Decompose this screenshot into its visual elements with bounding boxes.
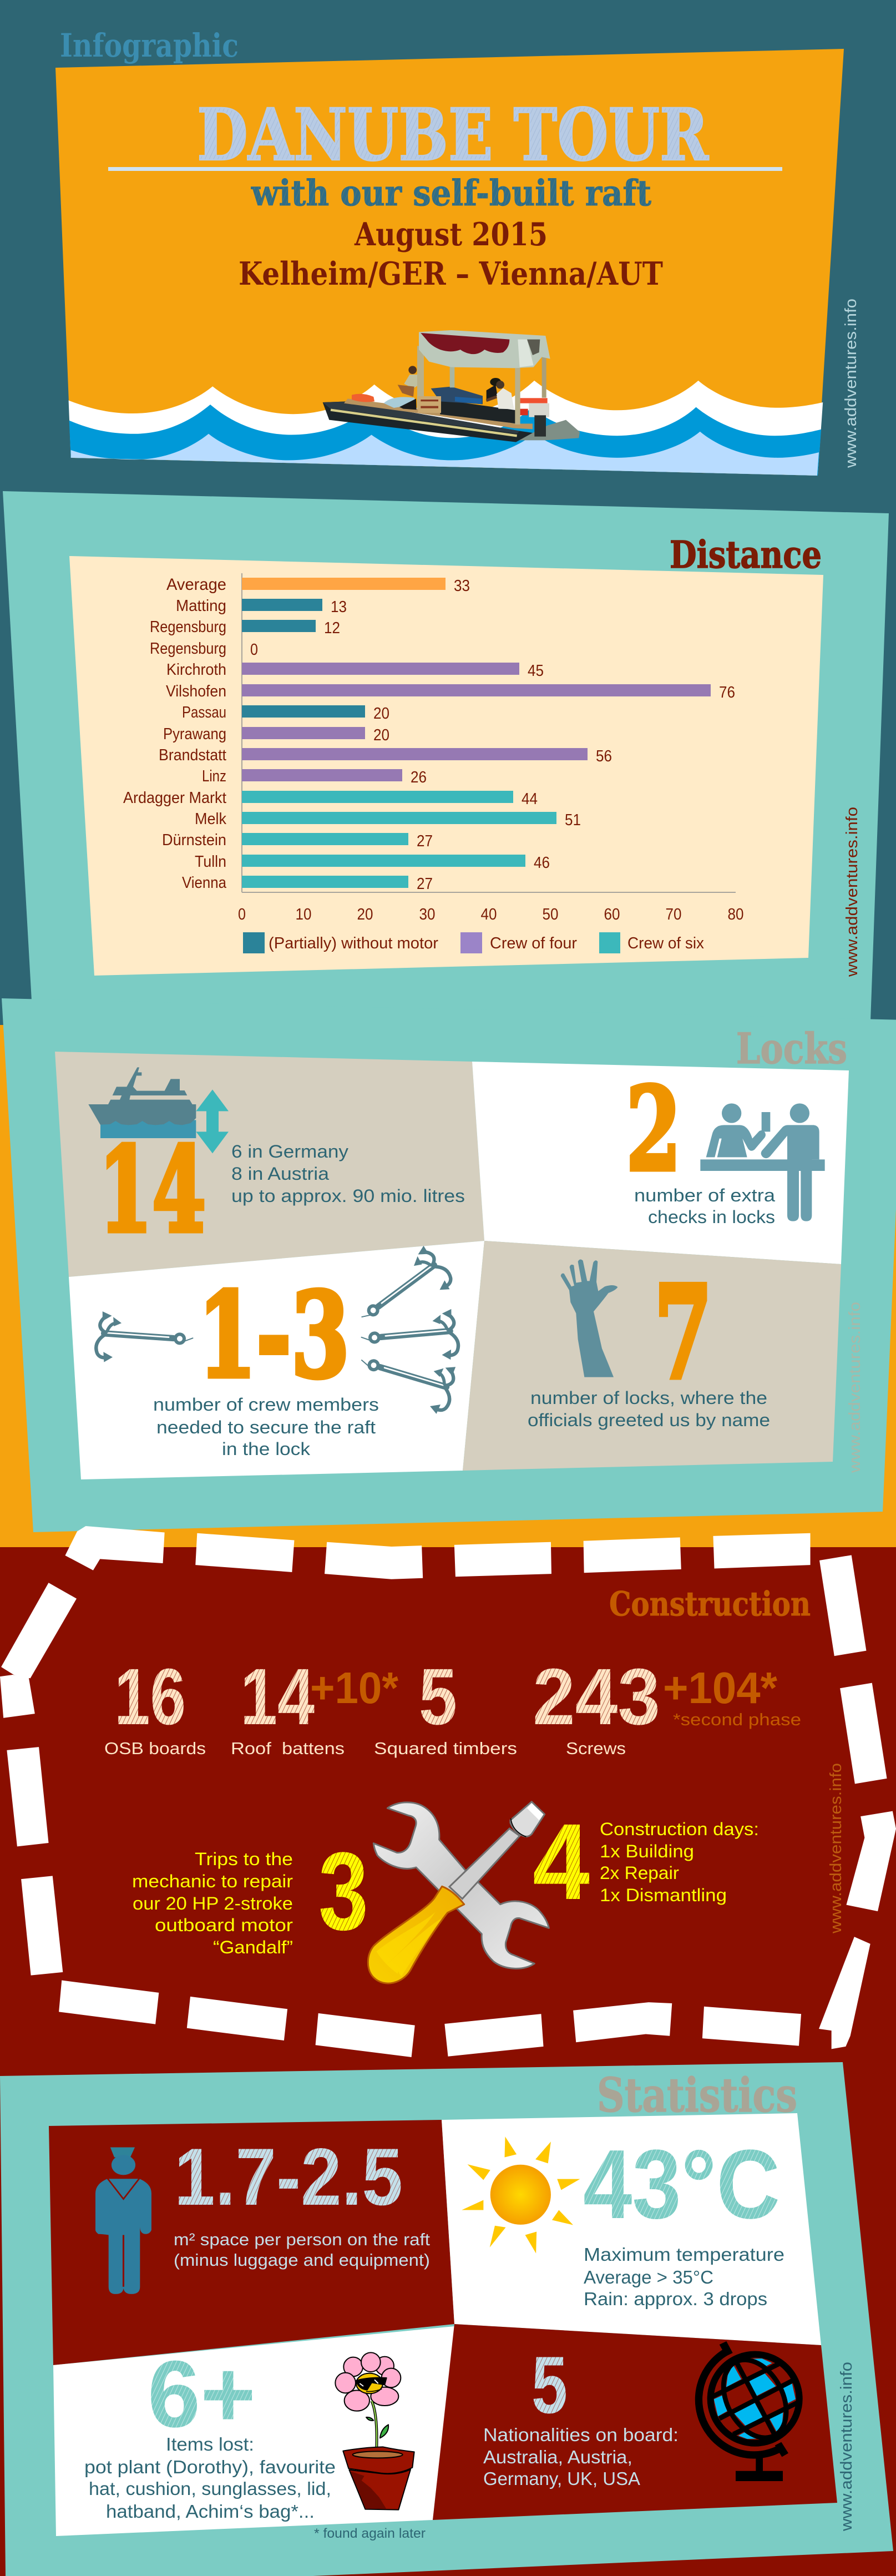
- construction days text: Construction days:: [600, 1819, 759, 1839]
- construction days text: [600, 1819, 759, 1905]
- bar chart: 27: [417, 832, 433, 850]
- bar chart: 76: [719, 684, 735, 701]
- heading: Locks: [736, 1024, 847, 1073]
- bar chart: 50: [543, 906, 558, 923]
- bar chart: Vilshofen: [166, 683, 226, 700]
- greeted text: number of locks, where the: [530, 1388, 767, 1408]
- bar chart: Average: [166, 575, 226, 594]
- waves: [69, 381, 823, 476]
- panel: hero: [55, 27, 860, 476]
- tile: nationalities: [433, 2324, 837, 2520]
- number: 6+: 6+: [148, 2341, 256, 2447]
- materials numbers: +10*: [310, 1663, 399, 1713]
- materials numbers: 5: [419, 1652, 457, 1741]
- subtitle: with our self-built raft: [251, 173, 651, 214]
- bar chart: 20: [373, 726, 389, 744]
- mechanic trips text: mechanic to repair: [132, 1871, 293, 1891]
- materials labels: Screws: [566, 1739, 626, 1758]
- watermark: www.addventures.info: [827, 1763, 845, 1934]
- materials numbers: 243: [533, 1652, 660, 1741]
- teal card: [3, 491, 889, 1021]
- number: 43°C: 43°C: [583, 2129, 780, 2239]
- number: 4: 4: [533, 1801, 590, 1922]
- bar chart: 51: [565, 811, 581, 829]
- bar chart: 20: [357, 906, 373, 923]
- nationalities text: Germany, UK, USA: [483, 2468, 640, 2489]
- bar chart: 20: [373, 705, 389, 723]
- bar chart: Tulln: [195, 853, 226, 871]
- mechanic trips text: outboard motor: [155, 1915, 293, 1935]
- icon: globe: [698, 2341, 799, 2481]
- bar chart: Brandstatt: [159, 746, 226, 764]
- tile: top right: [472, 1062, 849, 1264]
- bar chart: 0: [250, 641, 258, 659]
- nationalities text: Nationalities on board:: [483, 2425, 679, 2445]
- watermark: www.addventures.info: [846, 1302, 864, 1473]
- bar chart: 45: [528, 662, 544, 680]
- tile: top left: [55, 1052, 484, 1277]
- items lost text: [84, 2434, 336, 2522]
- bar chart: 33: [454, 577, 470, 595]
- items lost text: Items lost:: [166, 2434, 254, 2454]
- hero orange card: [55, 49, 844, 476]
- bar chart: Dürnstein: [162, 831, 226, 849]
- icon: sun: [462, 2136, 580, 2254]
- greeted text: [528, 1388, 770, 1430]
- extra checks text: [634, 1185, 775, 1227]
- materials labels: OSB boards: [104, 1739, 206, 1758]
- tile: items lost: [53, 2326, 454, 2536]
- number: 1-3: 1-3: [198, 1267, 350, 1404]
- page background: dark red: [0, 1547, 896, 2576]
- materials labels: [104, 1739, 626, 1758]
- page background: dark teal: [0, 0, 896, 1027]
- nationalities text: [483, 2425, 679, 2489]
- tile: temperature: [442, 2113, 821, 2345]
- bar chart: Kirchroth: [166, 661, 226, 679]
- icon: ship: [88, 1067, 229, 1153]
- materials numbers: +104*: [663, 1663, 778, 1713]
- temperature text: Average > 35°C: [584, 2267, 713, 2287]
- icon: wrench and screwdriver: [368, 1802, 549, 1983]
- mechanic trips text: [132, 1849, 293, 1957]
- bar chart: 44: [522, 790, 538, 808]
- bar chart: 46: [534, 854, 550, 872]
- bar chart: Pyrawang: [163, 725, 226, 743]
- space text: (minus luggage and equipment): [174, 2250, 430, 2270]
- page background: orange band: [0, 1025, 896, 1547]
- legend: Crew of six: [627, 935, 704, 952]
- bar chart: 56: [596, 747, 612, 765]
- bar chart: 13: [331, 598, 347, 616]
- bar chart: 26: [411, 769, 427, 786]
- items lost text: pot plant (Dorothy), favourite: [84, 2457, 336, 2477]
- icon: pot plant: [335, 2352, 414, 2510]
- bar chart: [123, 573, 743, 923]
- number: 14: 14: [99, 1122, 206, 1259]
- icon: hand: [561, 1260, 617, 1377]
- bar chart: 0: [238, 906, 246, 923]
- icon: raft: [323, 330, 580, 442]
- tile: bottom left: [69, 1241, 484, 1479]
- note: second phase: *second phase: [673, 1710, 801, 1729]
- lock counts text: [231, 1141, 465, 1206]
- panel: statistics: [0, 2062, 893, 2576]
- construction days text: 1x Dismantling: [600, 1885, 727, 1905]
- bar chart: 70: [666, 906, 681, 923]
- icon: sailor: [95, 2147, 151, 2294]
- temperature text: Maximum temperature: [584, 2244, 784, 2265]
- tile: space per person: [49, 2120, 454, 2365]
- bar chart: Linz: [202, 767, 226, 785]
- footnote: * found again later: [314, 2526, 426, 2541]
- bar chart: 12: [324, 619, 340, 637]
- construction days text: 2x Repair: [600, 1863, 679, 1883]
- number: 2: 2: [626, 1062, 681, 1198]
- greeted text: officials greeted us by name: [528, 1410, 770, 1430]
- crew text: in the lock: [222, 1439, 311, 1459]
- panel: locks: [2, 998, 896, 1532]
- cream chart card: [69, 556, 823, 976]
- bar chart: Regensburg: [150, 640, 226, 658]
- crew text: needed to secure the raft: [156, 1417, 376, 1437]
- items lost text: hatband, Achim‘s bag*...: [106, 2501, 315, 2522]
- bar chart: Vienna: [182, 874, 227, 892]
- bar chart: 30: [419, 906, 435, 923]
- nationalities text: Australia, Austria,: [483, 2447, 632, 2467]
- space text: m² space per person on the raft: [174, 2230, 430, 2249]
- label: Infographic: Infographic: [60, 27, 239, 64]
- icon: border check: [700, 1103, 825, 1221]
- extra checks text: checks in locks: [648, 1207, 775, 1227]
- date: August 2015: [354, 216, 548, 253]
- construction days text: 1x Building: [600, 1841, 694, 1861]
- tile: bottom right: [463, 1241, 841, 1471]
- extra checks text: number of extra: [634, 1185, 775, 1205]
- crew text: number of crew members: [153, 1395, 379, 1415]
- number: 7: 7: [654, 1258, 712, 1408]
- materials labels: Squared timbers: [374, 1739, 517, 1758]
- bar chart: 60: [604, 906, 620, 923]
- lock counts text: 6 in Germany: [231, 1141, 348, 1161]
- bar chart: Matting: [176, 597, 226, 615]
- panel: construction: [0, 1526, 896, 2057]
- teal card: [0, 2062, 893, 2576]
- dashed white border: [0, 1526, 896, 2057]
- title: DANUBE TOUR: [197, 93, 709, 177]
- bar chart: Melk: [195, 810, 226, 828]
- number: 3: 3: [318, 1830, 368, 1953]
- route: Kelheim/GER – Vienna/AUT: [239, 255, 663, 292]
- teal card: [2, 998, 896, 1532]
- mechanic trips text: Trips to the: [195, 1849, 293, 1869]
- bar chart: 10: [295, 906, 312, 923]
- heading: Statistics: [597, 2068, 797, 2123]
- temperature text: Rain: approx. 3 drops: [584, 2289, 767, 2309]
- bar chart: Ardagger Markt: [123, 789, 226, 807]
- number: 1.7-2.5: 1.7-2.5: [174, 2131, 403, 2222]
- title underline: [108, 167, 782, 171]
- materials numbers: [114, 1652, 778, 1741]
- legend: (Partially) without motor: [269, 935, 438, 952]
- materials labels: Roof battens: [231, 1739, 345, 1758]
- bar chart: 27: [417, 875, 433, 893]
- bar chart: 40: [480, 906, 497, 923]
- materials numbers: 14: [240, 1652, 315, 1741]
- icon: anchors: [95, 1244, 459, 1416]
- mechanic trips text: “Gandalf”: [213, 1937, 293, 1957]
- watermark: www.addventures.info: [843, 807, 861, 977]
- legend: Crew of four: [490, 935, 577, 952]
- crew text: [153, 1395, 379, 1459]
- materials numbers: 16: [114, 1652, 186, 1741]
- temperature text: [584, 2244, 784, 2309]
- space text: [174, 2230, 430, 2270]
- number: 5: 5: [531, 2340, 568, 2430]
- mechanic trips text: our 20 HP 2-stroke: [133, 1893, 293, 1913]
- heading: Construction: [609, 1585, 811, 1624]
- heading: Distance: [670, 533, 822, 577]
- bar chart: Passau: [182, 704, 226, 721]
- bar chart: Regensburg: [150, 618, 226, 636]
- watermark: www.addventures.info: [838, 2362, 855, 2532]
- items lost text: hat, cushion, sunglasses, lid,: [89, 2478, 331, 2499]
- legend: [243, 932, 704, 953]
- panel: distance: [3, 491, 889, 1021]
- watermark: www.addventures.info: [842, 299, 860, 468]
- lock counts text: 8 in Austria: [231, 1164, 329, 1184]
- lock counts text: up to approx. 90 mio. litres: [231, 1186, 465, 1206]
- bar chart: 80: [728, 906, 743, 923]
